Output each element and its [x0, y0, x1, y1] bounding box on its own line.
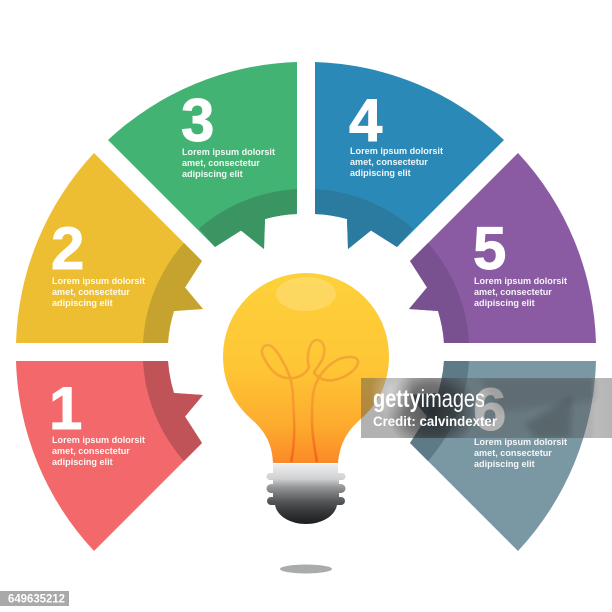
- icon: bulb shadow: [280, 564, 332, 574]
- panel: segment 2 (yellow): Lorem ipsum dolorsit: [52, 276, 145, 286]
- watermark: getty images banner: Credit: calvindexter: [373, 414, 498, 429]
- panel: segment 1 (red): adipiscing elit: [52, 457, 113, 467]
- panel: segment 3 (green): amet, consectetur: [182, 158, 260, 168]
- panel: segment 5 (purple): 5: [473, 215, 506, 282]
- image id label: 649635212: [8, 594, 65, 606]
- panel: segment 3 (green): Lorem ipsum dolorsit: [182, 147, 275, 157]
- panel: segment 2 (yellow): adipiscing elit: [52, 298, 113, 308]
- panel: segment 4 (blue): Lorem ipsum dolorsit: [350, 146, 443, 156]
- panel: segment 2 (yellow): 2: [51, 215, 84, 282]
- panel: segment 6 (slate): amet, consectetur: [474, 448, 552, 458]
- panel: segment 5 (purple): [409, 153, 596, 343]
- panel: segment 6 (slate): adipiscing elit: [474, 459, 535, 469]
- panel: segment 5 (purple): Lorem ipsum dolorsit: [474, 276, 567, 286]
- panel: segment 1 (red): [16, 361, 203, 551]
- panel: segment 1 (red): Lorem ipsum dolorsit: [52, 435, 145, 445]
- panel: segment 5 (purple): adipiscing elit: [474, 298, 535, 308]
- panel: segment 4 (blue): [315, 62, 504, 249]
- panel: segment 3 (green): 3: [181, 87, 214, 154]
- panel: segment 6 (slate): [409, 361, 596, 551]
- panel: segment 5 (purple): amet, consectetur: [474, 287, 552, 297]
- panel: segment 1 (red): 1: [49, 375, 82, 442]
- panel: segment 4 (blue): amet, consectetur: [350, 157, 428, 167]
- image id label: [0, 591, 69, 606]
- icon: light bulb: [223, 273, 389, 524]
- panel: segment 2 (yellow): amet, consectetur: [52, 287, 130, 297]
- panel: segment 3 (green): [108, 62, 297, 249]
- panel: segment 4 (blue): adipiscing elit: [350, 168, 411, 178]
- panel: segment 6 (slate): 6: [473, 376, 506, 443]
- panel: segment 6 (slate): Lorem ipsum dolorsit: [474, 437, 567, 447]
- watermark: getty images banner: [361, 378, 612, 438]
- watermark: getty images banner: gettyimages: [373, 385, 485, 413]
- panel: segment 1 (red): amet, consectetur: [52, 446, 130, 456]
- panel: segment 2 (yellow): [16, 153, 203, 343]
- panel: segment 4 (blue): 4: [349, 87, 383, 154]
- panel: segment 3 (green): adipiscing elit: [182, 169, 243, 179]
